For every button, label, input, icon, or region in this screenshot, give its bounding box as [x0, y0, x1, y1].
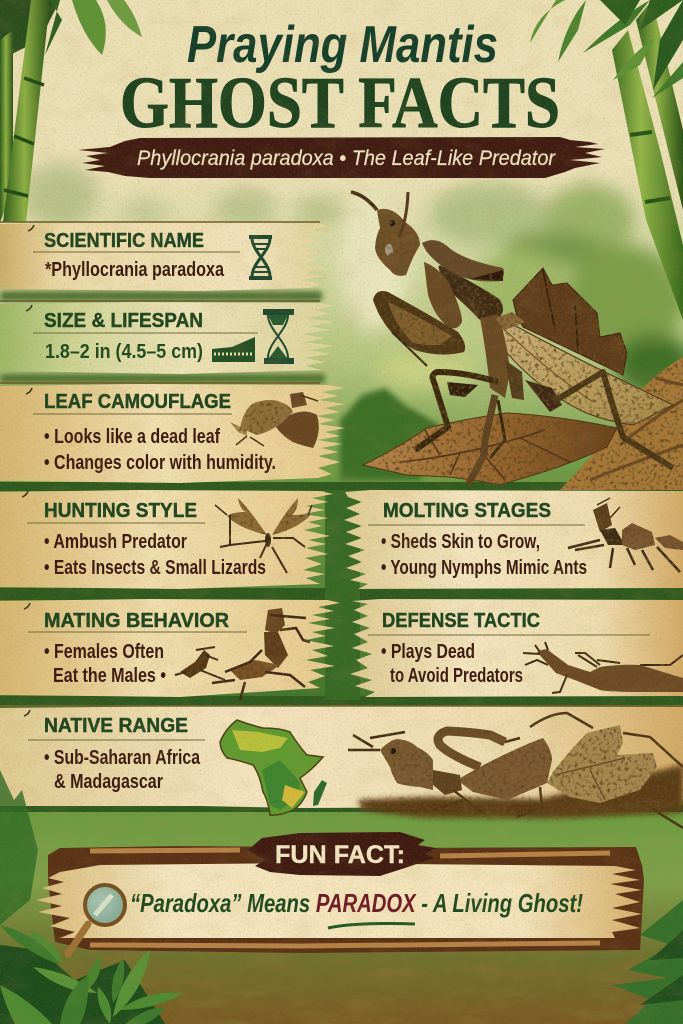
panel: mating behavior: Eat the Males • — [53, 665, 166, 687]
icon: mantis wings spread — [215, 498, 312, 573]
ground leaf — [363, 413, 617, 485]
icon: hourglass — [263, 309, 294, 364]
pronotum — [422, 240, 504, 282]
title — [120, 16, 560, 143]
panel: native range — [0, 706, 683, 828]
icon: ruler — [212, 337, 255, 362]
heading: NATIVE RANGE — [44, 715, 188, 737]
ground: mottled earth — [0, 945, 683, 1024]
heading: SIZE & LIFESPAN — [44, 310, 203, 332]
panel: leaf camouflage — [0, 383, 345, 483]
body text: • Sheds Skin to Grow, — [381, 531, 540, 553]
panel: defense tactic — [350, 599, 683, 697]
light wing — [493, 319, 673, 425]
map: Africa — [220, 720, 327, 815]
panel: hunting style: • Eats Insects & Small Lizards — [44, 557, 266, 579]
panel: hunting style — [0, 490, 333, 589]
icon: playing dead mantis — [523, 642, 683, 693]
panel: mating behavior — [0, 599, 340, 700]
title line: Ghost Facts: GHOST FACTS — [120, 62, 560, 143]
panel: molting stages: • Young Nymphs Mimic Ants — [381, 557, 587, 579]
panel: native range: & Madagascar — [54, 771, 163, 793]
heading: DEFENSE TACTIC — [382, 610, 540, 632]
subtitle banner: Phyllocrania paradoxa • The Leaf-Like Predator — [137, 147, 556, 170]
heading: HUNTING STYLE — [44, 500, 197, 522]
body text: *Phyllocrania paradoxa — [45, 259, 225, 281]
icon: DNA hourglass — [249, 237, 272, 278]
body text: • Sub-Saharan Africa — [44, 747, 201, 769]
body text: • Plays Dead — [381, 641, 475, 663]
panel: leaf camouflage: • Changes color with humidity. — [44, 452, 276, 474]
body text: 1.8–2 in (4.5–5 cm) — [45, 341, 203, 363]
fun fact text: “Paradoxa” Means PARADOX - A Living Ghost! — [130, 888, 583, 918]
icon: magnifying glass — [68, 885, 125, 954]
body text: • Ambush Predator — [44, 531, 187, 553]
fun fact board — [36, 832, 644, 954]
heading: MATING BEHAVIOR — [44, 610, 230, 632]
fun fact tag — [248, 832, 436, 876]
heading: MOLTING STAGES — [383, 500, 551, 522]
underline stroke — [328, 923, 415, 928]
illustration: crawling mantis — [348, 713, 683, 828]
panel: molting stages — [344, 490, 683, 589]
heading: LEAF CAMOUFLAGE — [44, 391, 231, 413]
front leg — [415, 372, 498, 450]
panel: defense tactic: to Avoid Predators — [390, 665, 523, 687]
foliage: bottom left — [0, 770, 183, 1024]
middle leg — [468, 395, 495, 485]
upper arm — [424, 262, 462, 328]
subtitle banner — [78, 137, 605, 178]
panel: scientific name — [0, 222, 330, 291]
thorax — [440, 267, 502, 318]
raptorial forearm — [373, 291, 465, 355]
panel: size and lifespan — [0, 301, 335, 374]
heading: SCIENTIFIC NAME — [44, 230, 204, 252]
hind leg — [553, 372, 673, 468]
icon: mantis pair — [175, 608, 310, 700]
body text: • Looks like a dead leaf — [44, 426, 220, 448]
icon: leaf mantis — [230, 392, 319, 448]
main mantis on leaf — [351, 192, 683, 490]
bamboo: top left — [0, 0, 142, 222]
log — [560, 357, 683, 490]
bamboo: top right — [530, 0, 683, 320]
head — [375, 209, 420, 276]
body text: • Females Often — [44, 641, 164, 663]
dark back leaf — [513, 268, 627, 375]
title line: Praying Mantis: Praying Mantis — [187, 16, 498, 74]
icon: nymph — [568, 498, 683, 572]
foliage: bottom right — [612, 900, 683, 1024]
fun fact tag: FUN FACT: — [275, 841, 405, 869]
